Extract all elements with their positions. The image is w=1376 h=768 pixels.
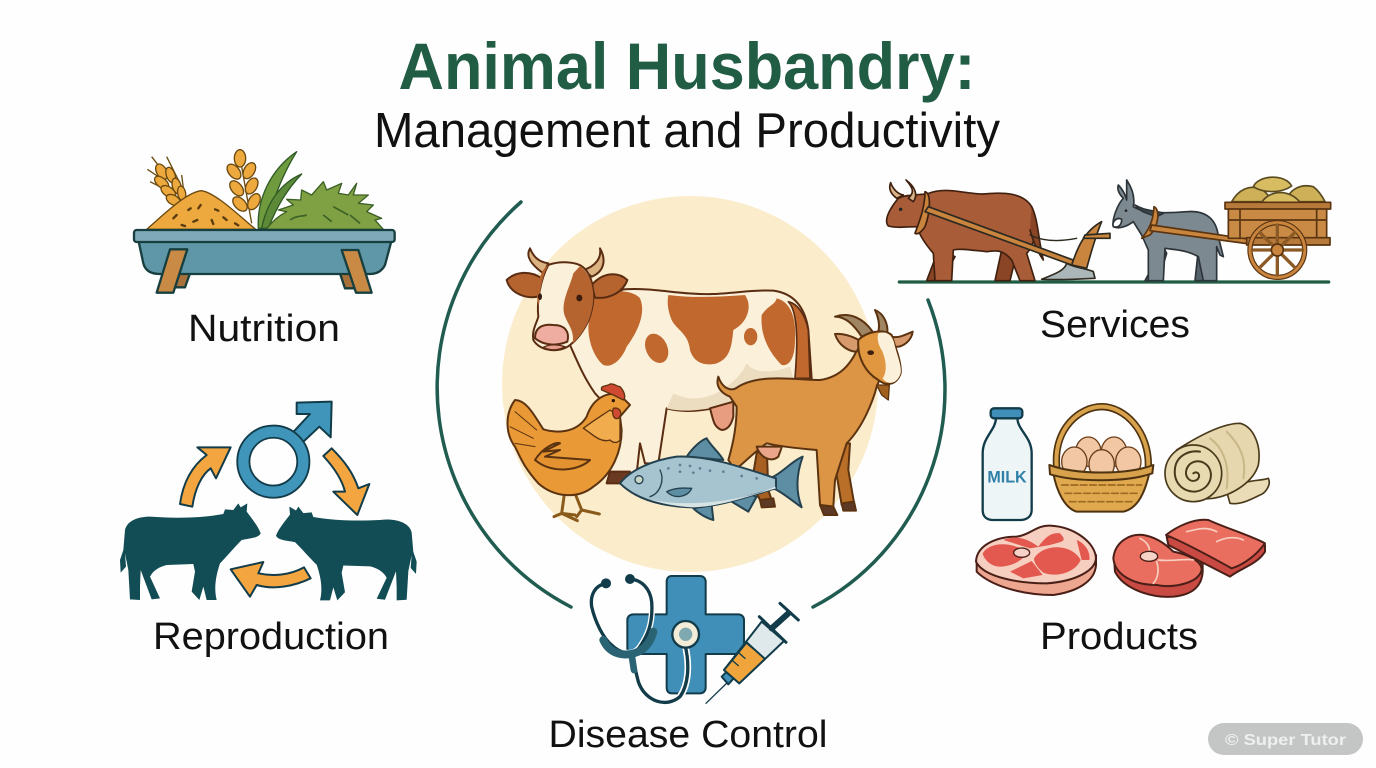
label: nutrition: Nutrition bbox=[188, 308, 340, 350]
trough front legs bbox=[157, 249, 372, 293]
icon: medical cross stethoscope syringe bbox=[591, 574, 798, 703]
milk bottle: MILK bbox=[987, 468, 1027, 487]
egg basket bbox=[1049, 407, 1153, 512]
grain pile bbox=[147, 191, 256, 229]
icon: ox plough and donkey cart bbox=[887, 177, 1331, 282]
cow bbox=[507, 248, 812, 483]
label: services: Services bbox=[1040, 304, 1190, 346]
trough rim bbox=[134, 230, 395, 242]
steak left bbox=[976, 526, 1096, 595]
wool roll bbox=[1165, 423, 1269, 504]
watermark badge bbox=[1208, 723, 1363, 755]
donkey bbox=[1113, 180, 1223, 281]
trough back legs bbox=[173, 273, 356, 288]
panel: products bbox=[976, 407, 1269, 658]
title: Animal Husbandry: bbox=[398, 29, 976, 103]
medical cross bbox=[627, 576, 744, 693]
panel: services bbox=[887, 177, 1331, 346]
hay pile bbox=[266, 182, 383, 229]
goat bbox=[717, 310, 913, 515]
chicken bbox=[507, 384, 630, 521]
central cream circle bbox=[502, 196, 878, 572]
male symbol ring bbox=[243, 432, 303, 492]
cart wheel bbox=[1250, 223, 1305, 277]
subtitle: Management and Productivity bbox=[374, 104, 1000, 158]
cycle arrows bbox=[180, 447, 369, 597]
wheat left bbox=[147, 157, 187, 208]
watermark badge: © Super Tutor bbox=[1225, 732, 1346, 749]
label: products: Products bbox=[1040, 616, 1198, 658]
steak right front slice bbox=[1113, 535, 1203, 597]
male symbol arrow bbox=[293, 402, 332, 443]
cow horns bbox=[528, 248, 548, 273]
ring arc left bbox=[437, 202, 571, 607]
panel: reproduction bbox=[120, 402, 417, 658]
cow ears bbox=[507, 273, 542, 297]
icon: animal products bbox=[976, 407, 1269, 597]
plough bbox=[925, 207, 1110, 280]
steak right back slice bbox=[1166, 520, 1265, 577]
fish bbox=[620, 438, 803, 520]
cow silhouette right bbox=[276, 507, 417, 600]
ox bbox=[887, 180, 1043, 281]
central animals illustration bbox=[507, 248, 913, 521]
cow head bbox=[533, 262, 593, 350]
cart box bbox=[1225, 202, 1331, 245]
icon: breeding cycle bbox=[120, 402, 417, 600]
label: reproduction: Reproduction bbox=[153, 616, 389, 658]
grass blades bbox=[258, 152, 297, 228]
icon: feed trough bbox=[134, 150, 395, 293]
cart shaft bbox=[1150, 225, 1250, 244]
label: disease control: Disease Control bbox=[548, 714, 828, 756]
title bbox=[374, 29, 1000, 158]
stethoscope bbox=[591, 579, 688, 702]
cow patches bbox=[588, 291, 795, 367]
trough bowl bbox=[138, 240, 392, 274]
ring arc right bbox=[813, 300, 945, 607]
milk bottle bbox=[983, 408, 1032, 520]
cow silhouette left bbox=[120, 503, 261, 600]
panel: disease control bbox=[548, 574, 828, 756]
ground line bbox=[899, 277, 1329, 287]
wheat centre bbox=[224, 150, 263, 223]
syringe bbox=[706, 603, 798, 703]
panel: nutrition bbox=[134, 150, 395, 350]
cart load bbox=[1232, 177, 1325, 202]
